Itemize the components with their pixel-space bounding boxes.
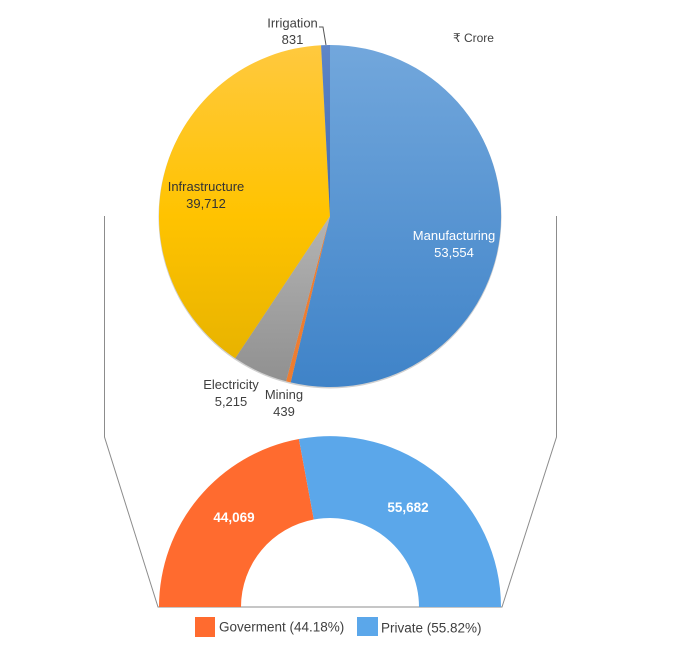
legend: private [357, 617, 482, 636]
label: electricity: Electricity [203, 377, 259, 392]
legend: government [195, 617, 344, 637]
label: mining: 439 [273, 404, 295, 419]
segment: private [299, 436, 501, 607]
pie chart [158, 45, 502, 388]
half-donut chart [159, 436, 501, 607]
slice: electricity [235, 216, 330, 381]
label: mining [265, 387, 303, 419]
label: irrigation: 831 [282, 32, 303, 47]
legend [195, 617, 482, 637]
slice: infrastructure [159, 45, 330, 358]
value: government: 44,069 [213, 510, 255, 525]
label: infrastructure [168, 179, 244, 211]
label: manufacturing: 53,554 [434, 245, 474, 260]
segment: government [159, 439, 314, 607]
unit label: ₹ Crore [453, 31, 494, 45]
slice: mining [286, 216, 330, 382]
slice: irrigation [321, 45, 330, 216]
label: electricity: 5,215 [215, 394, 247, 409]
value: private: 55,682 [387, 500, 429, 515]
label: mining: Mining [265, 387, 303, 402]
label: electricity [203, 377, 259, 409]
slice: manufacturing [291, 45, 501, 387]
label: infrastructure: 39,712 [186, 196, 226, 211]
legend: private: Private (55.82%) [381, 620, 482, 636]
label: manufacturing: Manufacturing [413, 228, 495, 243]
connector lines [104, 216, 556, 607]
label: manufacturing [413, 228, 495, 260]
label: infrastructure: Infrastructure [168, 179, 244, 194]
label: irrigation: Irrigation [267, 16, 318, 30]
legend: government: Goverment (44.18%) [219, 620, 344, 634]
label: irrigation [267, 16, 326, 47]
